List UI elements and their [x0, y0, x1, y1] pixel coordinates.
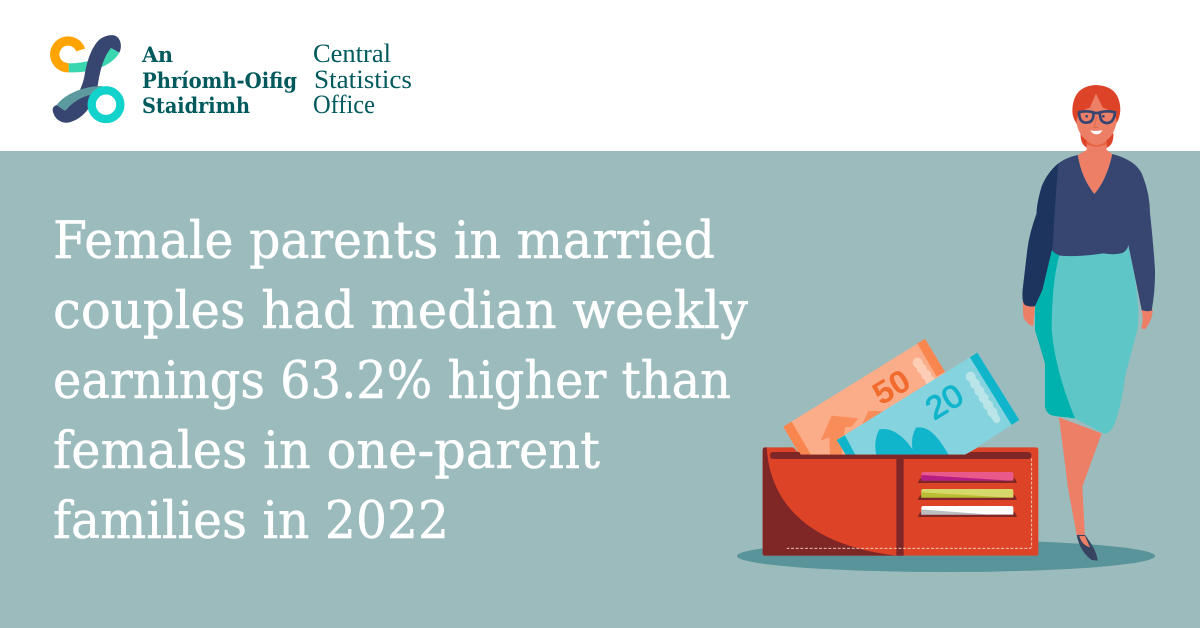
leg: [1059, 417, 1102, 547]
logo: Central Statistics Office: [53, 35, 412, 123]
illustration: ground shadow: [737, 540, 1155, 572]
headline: earnings 63.2% higher than: [53, 352, 731, 411]
hair: [1072, 85, 1120, 124]
illustration: wallet with banknotes: [763, 339, 1038, 556]
banknote: 20: [837, 353, 1019, 456]
banknote: 50: [783, 339, 965, 490]
head: [1076, 93, 1117, 144]
shoe: [1077, 535, 1098, 561]
logo text: Irish name: An: [141, 42, 173, 67]
logo text: English name: [313, 39, 412, 119]
banknote: 50: 50: [866, 362, 917, 412]
hair bun behind neck: [1081, 133, 1113, 148]
wallet body: [763, 447, 1038, 556]
nose: [1094, 117, 1098, 127]
logo text: English name: Office: [313, 90, 375, 119]
headline: [53, 212, 748, 551]
card slots: [918, 472, 1017, 517]
neck and chest: [1078, 138, 1112, 194]
headline: females in one-parent: [53, 422, 600, 481]
logo text: Irish name: Staidrimh: [142, 93, 250, 118]
logo text: Irish name: Phríomh-Oifig: [142, 68, 297, 93]
smile: [1090, 130, 1102, 134]
glasses: [1079, 111, 1115, 123]
logo text: Irish name: [141, 42, 297, 118]
illustration: woman with glasses: [1022, 85, 1155, 561]
logo text: English name: Central: [313, 39, 391, 68]
skirt: [1035, 247, 1138, 434]
logo text: English name: Statistics: [314, 65, 412, 94]
headline: families in 2022: [53, 492, 449, 551]
logo mark: [53, 35, 121, 123]
banknote: 20: 20: [919, 377, 970, 427]
headline: couples had median weekly: [53, 282, 748, 341]
hands: [1023, 302, 1035, 326]
headline: Female parents in married: [53, 212, 715, 271]
blouse: [1022, 154, 1155, 311]
